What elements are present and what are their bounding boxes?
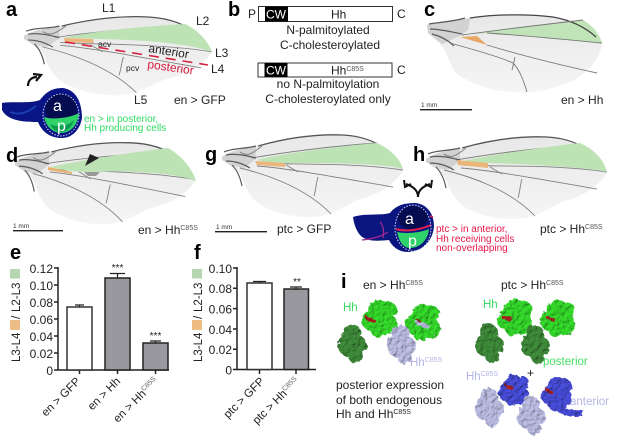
green caption: Hh producing cells xyxy=(84,123,166,134)
text: no N-palmitoylation xyxy=(265,77,391,106)
y tick labels: 0.06 xyxy=(209,302,232,316)
panel a: wild-type wing with en > GFP xyxy=(2,0,229,138)
x labels xyxy=(222,375,302,427)
scale bar c: 1 mm xyxy=(421,102,437,109)
x labels: C85S xyxy=(281,375,299,393)
structure: posterior endogenous Hh pair xyxy=(475,299,575,364)
x labels: ptc > Hh xyxy=(251,388,290,427)
scale bar g: 1 mm xyxy=(216,224,232,231)
wing disc h: a xyxy=(405,211,414,228)
wing disc a: p xyxy=(57,118,66,135)
red caption: non-overlapping xyxy=(436,243,508,254)
panel h: ptc > HhC85S wing xyxy=(353,137,607,254)
vein labels: L5 xyxy=(134,93,148,107)
text: posterior expression: C85S xyxy=(393,409,411,416)
y tick labels: 0.10 xyxy=(209,262,232,276)
y tick labels: 0.02 xyxy=(30,347,53,361)
scale bar d xyxy=(13,223,63,231)
scale bar d: 1 mm xyxy=(13,223,29,230)
construct Hh: CW xyxy=(266,8,287,22)
vein labels: L1 xyxy=(102,1,116,15)
wing a xyxy=(23,15,213,97)
y tick labels: 0.02 xyxy=(209,343,232,357)
plus sign: + xyxy=(527,366,534,380)
construct HhC85S: C85S xyxy=(346,66,364,73)
wing c xyxy=(427,15,602,93)
bar: ptc > HhC85S xyxy=(284,277,308,370)
text: posterior expression: Hh and Hh xyxy=(336,407,393,421)
label HhC85S left: C85S xyxy=(425,357,443,364)
genotype label h: ptc > Hh xyxy=(540,222,585,236)
genotype label h: C85S xyxy=(585,224,603,231)
label Hh left: Hh xyxy=(343,302,358,314)
bar: en > GFP xyxy=(67,305,92,370)
y tick labels: 0 xyxy=(225,364,232,378)
y axis title with colour keys: L3-L4 xyxy=(11,332,23,362)
panel b: protein schematics xyxy=(228,0,406,106)
structure: endogenous Hh with HhC85S xyxy=(338,300,440,364)
label HhC85S right: C85S xyxy=(481,371,499,378)
vein labels: L2 xyxy=(196,14,210,28)
bar: en > HhC85S xyxy=(143,331,168,370)
construct HhC85S xyxy=(258,63,406,78)
text: N-palmitoylated: N-palmitoylated xyxy=(286,23,370,37)
bar: en > Hh xyxy=(105,263,130,370)
bar: ptc > HhC85S: ** xyxy=(293,277,301,288)
label HhC85S right: Hh xyxy=(466,371,481,383)
bar: en > Hh: *** xyxy=(112,263,123,274)
panel letter d: d xyxy=(6,145,18,167)
genotype label d: C85S xyxy=(180,225,198,232)
text: no N-palmitoylation: no N-palmitoylation xyxy=(277,77,379,91)
wing disc a xyxy=(2,88,82,138)
panel c: en > Hh wing xyxy=(420,0,603,110)
two-headed arrow xyxy=(404,180,432,197)
label anterior: anterior xyxy=(570,396,609,408)
bar: en > HhC85S: *** xyxy=(150,331,161,342)
panel letter e: e xyxy=(10,242,21,264)
y axis title with colour keys xyxy=(10,269,23,362)
red dashed line: anterior/posterior boundary xyxy=(65,42,208,65)
y axis title with colour keys xyxy=(192,269,205,362)
panel i: protein structures xyxy=(336,271,609,435)
heading: en > HhC85S: en > Hh xyxy=(363,278,405,292)
panel letter h: h xyxy=(413,144,425,166)
y tick labels xyxy=(30,262,53,378)
y tick labels: 0.12 xyxy=(30,262,53,276)
axes and ticks xyxy=(233,267,316,374)
y axis title with colour keys: L2-L3 xyxy=(11,283,23,312)
red caption: ptc > in anterior, xyxy=(436,224,507,235)
construct Hh xyxy=(248,6,406,22)
text: N-palmitoylated xyxy=(280,23,380,52)
y tick labels: 0.04 xyxy=(30,330,53,344)
icon: arrowhead xyxy=(85,154,99,166)
y tick labels xyxy=(209,262,232,378)
axes and ticks xyxy=(54,267,169,374)
wing disc h xyxy=(353,203,434,252)
wing g xyxy=(222,135,403,217)
text: posterior expression xyxy=(336,378,444,421)
x labels: ptc > GFP xyxy=(222,375,267,421)
y tick labels: 0.08 xyxy=(209,282,232,296)
panel letter i: i xyxy=(341,271,347,293)
label posterior: posterior xyxy=(543,356,588,368)
text: posterior expression: of both endogenous xyxy=(336,393,442,407)
y tick labels: 0.04 xyxy=(209,323,232,337)
scale bar c xyxy=(420,102,472,110)
label HhC85S left: Hh xyxy=(410,357,425,369)
vein labels: pcv xyxy=(126,63,140,73)
compartment labels: posterior xyxy=(147,57,195,77)
construct Hh: P xyxy=(248,7,256,21)
construct HhC85S: CW xyxy=(266,64,287,78)
genotype label d: en > Hh xyxy=(138,223,180,237)
x labels: en > Hh xyxy=(86,376,123,413)
genotype label g: ptc > GFP xyxy=(277,222,331,236)
wing d xyxy=(13,140,197,227)
x labels: en > GFP xyxy=(40,375,83,419)
heading: ptc > HhC85S: C85S xyxy=(546,280,564,287)
panel d: en > HhC85S wing xyxy=(6,140,198,237)
green caption: en > in posterior, xyxy=(84,114,158,125)
green caption xyxy=(84,114,166,134)
curved arrow xyxy=(28,74,41,86)
genotype label c: en > Hh xyxy=(561,93,603,107)
vein labels: acv xyxy=(98,39,112,49)
vein labels: L3 xyxy=(215,46,229,60)
y axis title with colour keys: / xyxy=(193,315,205,319)
genotype label: en > GFP xyxy=(174,93,226,107)
panel f: bar chart xyxy=(192,242,316,427)
panel letter g: g xyxy=(205,144,217,166)
y axis title with colour keys: L3-L4 xyxy=(193,332,205,362)
vein labels xyxy=(98,1,229,107)
construct HhC85S: C xyxy=(397,63,406,77)
heading: en > HhC85S: C85S xyxy=(405,280,423,287)
y tick labels: 0.08 xyxy=(30,296,53,310)
construct Hh: Hh xyxy=(331,8,346,22)
y tick labels: 0.10 xyxy=(30,279,53,293)
red caption: Hh receiving cells xyxy=(436,234,514,245)
wing h xyxy=(426,137,607,219)
y tick labels: 0 xyxy=(46,364,53,378)
label Hh right: Hh xyxy=(483,299,498,311)
x labels xyxy=(40,375,161,425)
text: no N-palmitoylation: C-cholesteroylated only xyxy=(265,92,391,106)
x labels: en > Hh xyxy=(112,388,149,425)
compartment labels: anterior xyxy=(148,41,190,61)
text: N-palmitoylated: C-cholesteroylated xyxy=(280,38,380,52)
construct HhC85S: Hh xyxy=(331,64,346,78)
vein labels: L4 xyxy=(211,62,225,76)
text: posterior expression: posterior expression xyxy=(336,378,444,392)
x labels: C85S xyxy=(140,375,158,393)
heading: ptc > HhC85S: ptc > Hh xyxy=(501,278,546,292)
compartment labels xyxy=(147,41,195,77)
structure: anterior HhC85S pair xyxy=(475,375,584,435)
y axis title with colour keys: / xyxy=(11,315,23,319)
panel letter f: f xyxy=(194,242,201,264)
bar: ptc > GFP xyxy=(247,282,272,370)
panel e: bar chart xyxy=(10,242,169,425)
wing disc h: p xyxy=(408,233,417,250)
panel g: ptc > GFP wing xyxy=(205,135,403,236)
scale bar g xyxy=(215,224,267,232)
y axis title with colour keys: L2-L3 xyxy=(193,283,205,312)
red caption xyxy=(436,224,514,254)
construct Hh: C xyxy=(397,7,406,21)
y tick labels: 0.06 xyxy=(30,313,53,327)
wing disc a: a xyxy=(53,98,62,115)
